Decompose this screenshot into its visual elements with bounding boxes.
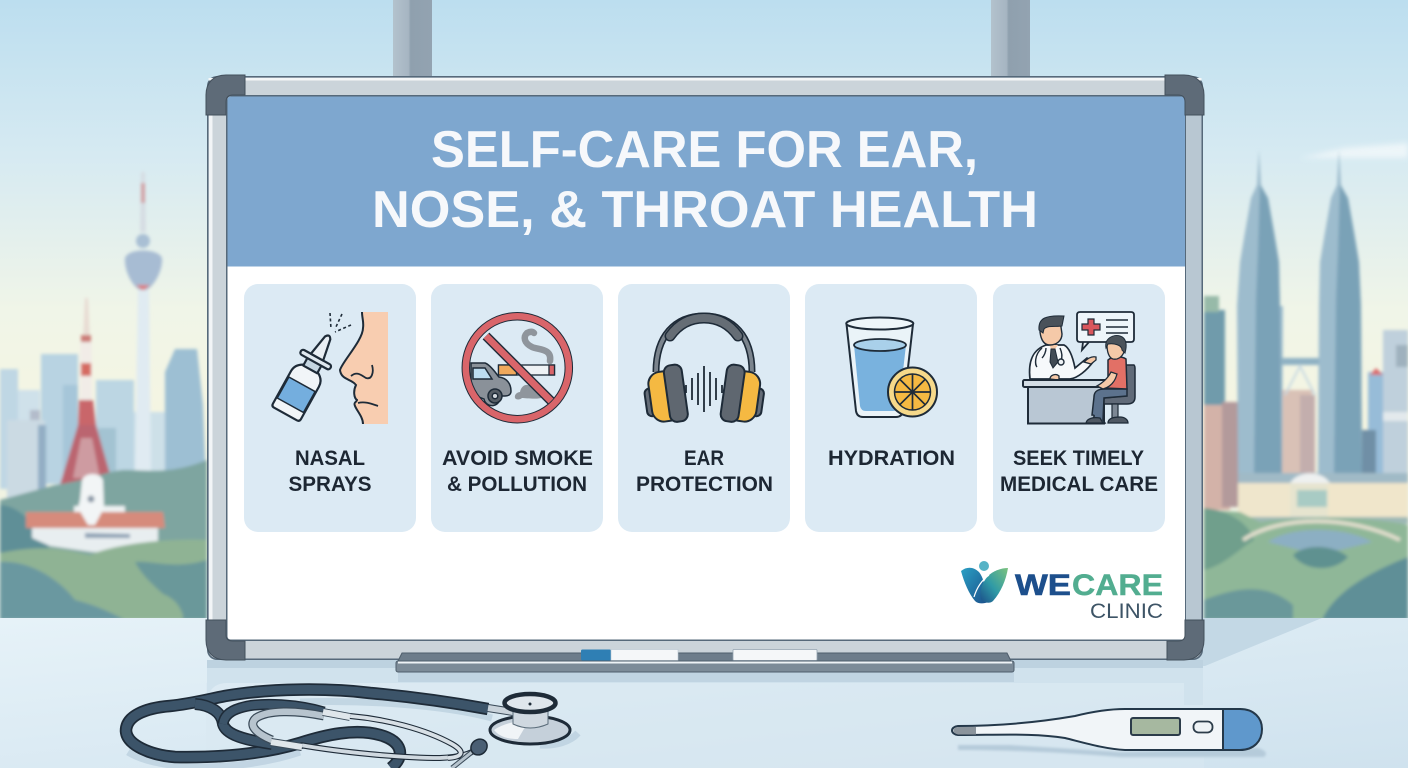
icon: speech bubble xyxy=(1077,312,1134,350)
label: PROTECTION xyxy=(636,473,773,496)
icon: prohibition ring xyxy=(466,316,569,419)
label: & POLLUTION xyxy=(447,473,587,496)
marker tray xyxy=(396,650,1014,672)
header band xyxy=(228,96,1185,266)
petronas towers xyxy=(1237,150,1362,476)
left ear cup xyxy=(641,364,689,426)
label xyxy=(636,447,773,496)
right ear cup xyxy=(720,364,767,426)
icon: spray droplets xyxy=(330,313,351,332)
thermometer xyxy=(952,709,1266,757)
logo: WeCare Clinic xyxy=(961,561,1163,623)
board surface xyxy=(228,96,1185,640)
board frame xyxy=(207,76,1203,660)
title xyxy=(372,121,1038,239)
label xyxy=(1000,447,1158,496)
white marker xyxy=(733,650,817,660)
icon: lemon slice xyxy=(888,368,937,416)
icon: no smoke sign xyxy=(466,316,569,419)
icon: desk xyxy=(1023,380,1108,424)
icon: patient and chair xyxy=(1086,336,1135,423)
thermometer cap xyxy=(1223,709,1262,750)
label: AVOID SMOKE xyxy=(442,447,593,470)
icon: nose profile xyxy=(340,312,388,424)
frame corners xyxy=(206,75,1204,660)
thermometer body xyxy=(952,709,1240,750)
logo wordmark: CARE xyxy=(1072,569,1163,602)
metal ferrules xyxy=(323,712,350,717)
left city skyline xyxy=(0,172,207,620)
label xyxy=(288,447,372,496)
KL tower xyxy=(125,172,162,474)
stethoscope xyxy=(126,690,578,768)
panel: nasal sprays xyxy=(244,284,416,532)
icon: cigarette xyxy=(498,365,554,375)
trees back xyxy=(0,460,207,620)
icon: cigarette smoke xyxy=(525,332,550,361)
logo wordmark: WE xyxy=(1015,569,1071,602)
chest piece xyxy=(488,694,570,744)
label: NASAL xyxy=(295,447,365,470)
cloud xyxy=(1300,143,1408,158)
panel: avoid smoke and pollution xyxy=(431,284,603,532)
palace building xyxy=(1238,473,1408,485)
label: SEEK TIMELY xyxy=(1013,447,1144,470)
table top xyxy=(0,618,1408,768)
thermometer display xyxy=(1131,718,1180,735)
red lattice tower xyxy=(60,298,113,485)
logo subtext: CLINIC xyxy=(1090,600,1163,623)
title: NOSE, & THROAT HEALTH xyxy=(372,181,1038,239)
title: SELF-CARE FOR EAR, xyxy=(431,121,978,179)
icon: sound wave xyxy=(686,366,722,412)
icon: car xyxy=(471,363,511,406)
thermometer button xyxy=(1194,722,1212,732)
ear tips xyxy=(452,736,490,768)
thermometer shadow xyxy=(958,745,1266,757)
panel: hydration xyxy=(805,284,977,532)
park greenery xyxy=(1204,510,1408,620)
colonial building xyxy=(26,512,165,528)
front building xyxy=(7,420,45,512)
label: SPRAYS xyxy=(288,473,372,496)
icon: exhaust cloud xyxy=(515,385,545,400)
right city skyline xyxy=(1204,150,1408,620)
icon: nasal spray bottle xyxy=(271,327,344,422)
icon: doctor xyxy=(1030,316,1096,380)
whiteboard xyxy=(206,75,1204,660)
label xyxy=(442,447,593,496)
label: HYDRATION xyxy=(828,447,955,470)
right tall buildings xyxy=(1362,330,1408,485)
label: MEDICAL CARE xyxy=(1000,473,1158,496)
trees front xyxy=(0,540,207,620)
label: EAR xyxy=(684,447,724,470)
panel: ear protection xyxy=(618,284,790,532)
icon: earmuffs xyxy=(641,316,767,426)
board shadow on table xyxy=(206,618,1322,768)
metal binaurals xyxy=(253,712,478,758)
blue marker xyxy=(581,650,678,660)
stethoscope shadow xyxy=(128,702,578,767)
logo wordmark xyxy=(1015,569,1163,602)
icon: glass of water xyxy=(846,318,913,417)
window poles xyxy=(393,0,1030,76)
panel: seek timely medical care xyxy=(993,284,1165,532)
icon: logo mark xyxy=(961,561,1008,603)
tubing xyxy=(126,690,488,768)
